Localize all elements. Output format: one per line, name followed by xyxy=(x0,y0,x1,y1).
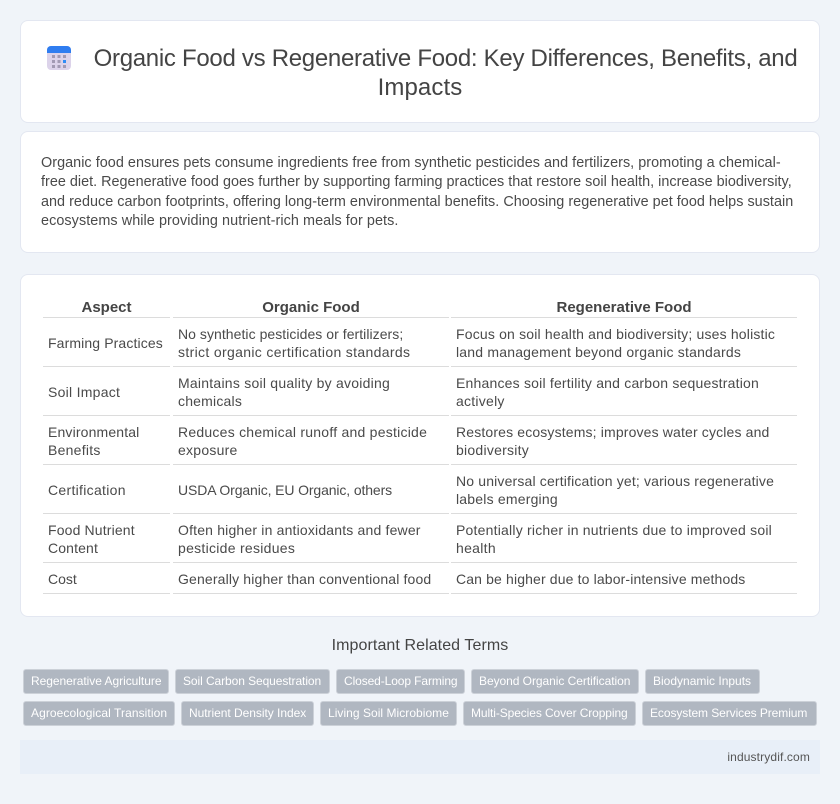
table rows: USDA Organic, EU Organic, others xyxy=(178,482,392,498)
table rows: strict organic certification standards xyxy=(178,344,410,360)
table header: regenerative food: Regenerative Food xyxy=(556,299,692,316)
table rows: Cost xyxy=(48,571,77,587)
panel: title card xyxy=(20,20,820,123)
table rows: land management beyond organic standards xyxy=(456,344,741,360)
related terms chips: Ecosystem Services Premium xyxy=(650,706,807,720)
table rows: No synthetic pesticides or fertilizers; xyxy=(178,326,403,342)
table rows: Enhances soil fertility and carbon sequestration xyxy=(456,375,759,391)
title: Impacts xyxy=(378,74,462,101)
table rows: Certification xyxy=(48,482,126,498)
table rows: Restores ecosystems; improves water cycles and xyxy=(456,424,769,440)
table rows: Reduces chemical runoff and pesticide xyxy=(178,424,427,440)
related terms chips xyxy=(23,669,817,726)
related terms chips: Soil Carbon Sequestration xyxy=(183,674,321,688)
text block: introduction: Organic food ensures pets consume ingredients free from synthetic pesticides and fertilizers, promoting a chemical- xyxy=(41,155,781,171)
table rows: Often higher in antioxidants and fewer xyxy=(178,522,421,538)
text block: introduction: ecosystems while providing nutrient-rich meals for pets. xyxy=(41,213,398,229)
table rows: Generally higher than conventional food xyxy=(178,571,431,587)
table header: organic food: Organic Food xyxy=(262,299,360,316)
related terms chips: Closed-Loop Farming xyxy=(344,674,458,688)
related terms chips: Nutrient Density Index xyxy=(189,706,306,720)
text block: introduction: free diet. Regenerative food goes further by supporting farming practices that restore soil health, increase biodiversity, xyxy=(41,174,792,190)
table rows: labels emerging xyxy=(456,491,558,507)
table rows: pesticide residues xyxy=(178,540,295,556)
table rows: Food Nutrient xyxy=(48,522,135,538)
table rows xyxy=(43,317,797,594)
table rows: Benefits xyxy=(48,442,101,458)
table rows: actively xyxy=(456,393,505,409)
title: Organic Food vs Regenerative Food: Key Differences, Benefits, and xyxy=(94,45,797,72)
footer xyxy=(20,740,820,774)
table rows: biodiversity xyxy=(456,442,529,458)
panel: introduction xyxy=(20,131,820,253)
table rows: health xyxy=(456,540,496,556)
heading: important related terms: Important Related Terms xyxy=(332,637,508,654)
panel: comparison table xyxy=(20,274,820,617)
table rows: Can be higher due to labor-intensive methods xyxy=(456,571,745,587)
related terms chips: Agroecological Transition xyxy=(31,706,167,720)
related terms chips: Multi-Species Cover Cropping xyxy=(471,706,628,720)
icon: calendar xyxy=(47,46,71,70)
footer source text: industrydif.com xyxy=(727,750,810,764)
text block: introduction: and reduce carbon footprints, offering long-term environmental benefits. Choosing regenerative pet food helps sustain xyxy=(41,194,793,210)
related terms chips: Living Soil Microbiome xyxy=(328,706,449,720)
table rows: chemicals xyxy=(178,393,242,409)
related terms chips: Regenerative Agriculture xyxy=(31,674,161,688)
related terms chips: Biodynamic Inputs xyxy=(653,674,751,688)
table rows: Farming Practices xyxy=(48,335,163,351)
table rows: Soil Impact xyxy=(48,384,120,400)
table rows: Focus on soil health and biodiversity; uses holistic xyxy=(456,326,775,342)
table rows: No universal certification yet; various regenerative xyxy=(456,473,774,489)
table header: aspect: Aspect xyxy=(81,299,132,316)
text block: introduction xyxy=(41,155,793,229)
table rows: Potentially richer in nutrients due to improved soil xyxy=(456,522,772,538)
title xyxy=(94,45,797,101)
table rows: Environmental xyxy=(48,424,139,440)
table rows: Content xyxy=(48,540,98,556)
table rows: exposure xyxy=(178,442,238,458)
related terms chips: Beyond Organic Certification xyxy=(479,674,630,688)
table rows: Maintains soil quality by avoiding xyxy=(178,375,390,391)
